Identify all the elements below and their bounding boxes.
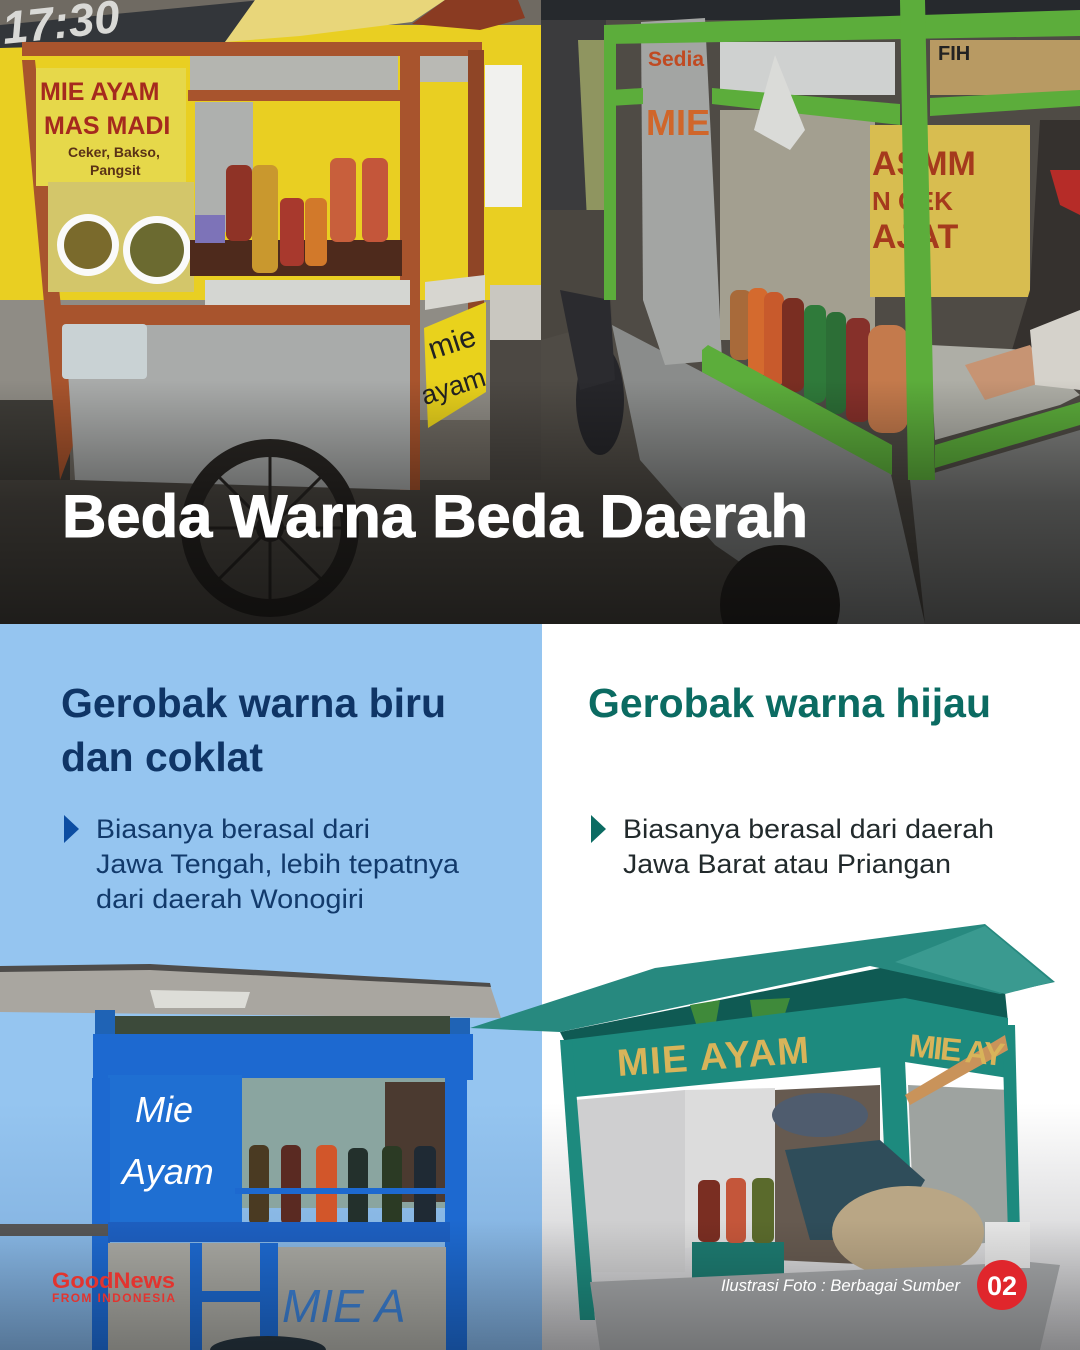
bottom darkening overlay <box>0 1220 1080 1350</box>
heading: blue and brown cart: dan coklat <box>61 734 263 780</box>
heading: blue and brown cart: Gerobak warna biru <box>61 680 446 726</box>
page number badge: 02 <box>987 1271 1017 1301</box>
panel: right photo of green cart: FIH <box>938 43 970 65</box>
heading: green cart: Gerobak warna hijau <box>588 680 991 726</box>
panel: blue cart section background <box>0 624 542 1350</box>
text block: blue cart origin: dari daerah Wonogiri <box>96 884 364 914</box>
panel: left photo of yellow stall and brown cart: ayam <box>417 362 489 411</box>
text block: blue cart origin: Biasanya berasal dari <box>96 814 370 844</box>
panel: left photo of yellow stall and brown cart: Ceker, Bakso, <box>68 144 160 160</box>
illustration: blue cart: MIE A <box>282 1280 406 1332</box>
photo darkening overlay <box>0 380 1080 624</box>
illustration: blue cart: Ayam <box>120 1151 214 1192</box>
panel: left photo of yellow stall and brown cart: mie <box>424 320 480 366</box>
panel: green cart section background <box>542 624 1080 1350</box>
illustration: blue cart: Mie <box>135 1089 193 1130</box>
panel: left photo of yellow stall and brown cart: Pangsit <box>90 162 141 178</box>
panel: left photo of yellow stall and brown cart <box>0 0 541 624</box>
illustration: green cart <box>470 924 1060 1350</box>
panel: right photo of green cart: N CEK <box>872 186 953 216</box>
logo: GoodNews from Indonesia <box>52 1268 175 1305</box>
logo: GoodNews from Indonesia: FROM INDONESIA <box>52 1291 175 1305</box>
page number badge <box>977 1260 1027 1310</box>
icon: blue arrow bullet <box>64 815 79 843</box>
panel: right photo of green cart: MIE <box>646 102 710 143</box>
illustration: green cart: MIE AYAM <box>616 1030 810 1085</box>
panel: left photo of yellow stall and brown cart: MIE AYAM <box>40 78 159 106</box>
illustration: green cart: MIE AY <box>907 1027 1007 1073</box>
logo: GoodNews from Indonesia: GoodNews <box>52 1268 175 1293</box>
panel: left photo of yellow stall and brown cart: MAS MADI <box>44 112 170 140</box>
icon: green arrow bullet <box>591 815 606 843</box>
panel: right photo of green cart: Sedia <box>648 48 704 71</box>
panel: right photo of green cart: ASMM <box>872 145 976 183</box>
text block: green cart origin: Biasanya berasal dari daerah <box>623 814 994 844</box>
illustration: blue cart <box>0 964 501 1350</box>
text block: blue cart origin: Jawa Tengah, lebih tepatnya <box>96 849 460 879</box>
panel: right photo of green cart: AJAT <box>872 218 958 256</box>
photo credit: Ilustrasi Foto : Berbagai Sumber <box>721 1276 961 1295</box>
text block: green cart origin: Jawa Barat atau Priangan <box>623 849 951 879</box>
title: Beda Warna Beda Daerah <box>62 483 808 550</box>
panel: right photo of green cart <box>541 0 1080 665</box>
